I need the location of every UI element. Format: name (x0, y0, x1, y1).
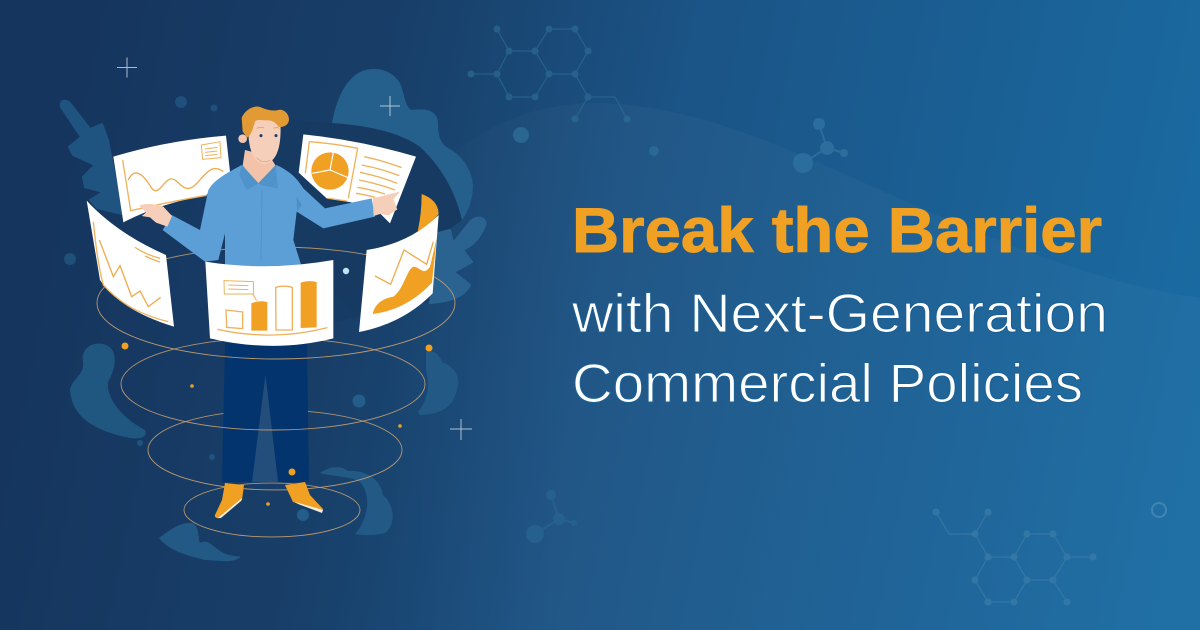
ear (238, 134, 247, 143)
neck (243, 150, 276, 183)
collar (239, 165, 278, 190)
hair (242, 107, 289, 138)
plant: blob bottom (159, 523, 241, 561)
accent dots (122, 342, 432, 506)
sparkle stars (117, 58, 472, 440)
plant: lower left blob (70, 344, 146, 439)
dark zone behind the figure (240, 115, 462, 330)
molecule: small upper right (793, 118, 848, 173)
eyes (259, 134, 262, 137)
molecule: top hexagons (468, 26, 630, 122)
background dots (64, 96, 659, 521)
molecule: bottom hexagons (932, 508, 1096, 606)
title (571, 196, 1108, 414)
plant: right leaf (430, 218, 486, 303)
background wave (380, 103, 1200, 630)
panel: bar chart centre (205, 260, 333, 346)
plant: upper right blob (332, 69, 473, 220)
rings: front arcs (97, 303, 455, 537)
light blue dot (343, 268, 349, 274)
rings: back arcs (97, 247, 455, 510)
leg gap shade (252, 375, 278, 482)
smile (257, 158, 270, 162)
figure and panels (87, 107, 439, 346)
panel: line chart left (87, 201, 174, 327)
person: right shoe (285, 482, 323, 513)
brows (257, 126, 279, 130)
person: torso and arms (163, 165, 375, 267)
ring: bottom right outline (1152, 503, 1166, 517)
heading: Break the Barrier: Break the Barrier (572, 196, 1102, 266)
person: left hand (139, 204, 172, 227)
face (249, 118, 281, 164)
person: legs (222, 343, 309, 482)
person: right hand (373, 192, 400, 216)
plant: upper left leaf (61, 101, 122, 214)
molecule: small lower (526, 490, 577, 543)
subheading line two: Commercial Policies (572, 352, 1083, 414)
panel: pie chart top right (299, 134, 416, 223)
plant: blob behind feet (320, 467, 393, 535)
person: head (238, 107, 289, 190)
panel: line chart top left (113, 136, 230, 222)
panel: area chart right (359, 194, 439, 332)
subheading line one: with Next-Generation (571, 282, 1108, 344)
person: left shoe (215, 483, 244, 518)
plant: lower right blob (418, 351, 458, 415)
